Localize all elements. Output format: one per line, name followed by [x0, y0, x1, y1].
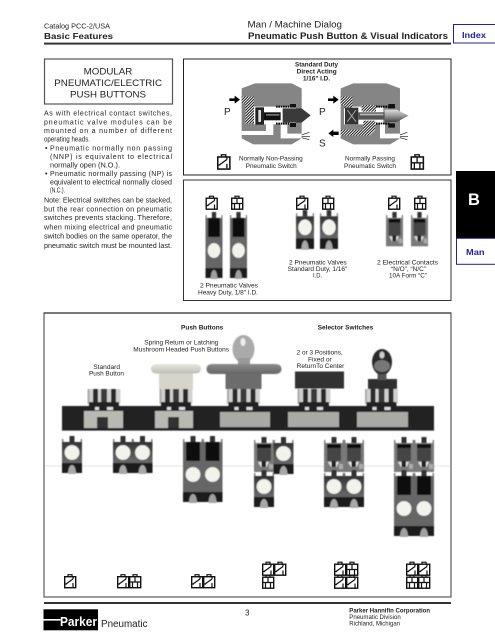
port labels: P — [224, 107, 231, 118]
index tab: Index — [462, 30, 486, 40]
text block: introduction: normally open (N.O.). — [50, 162, 120, 169]
header right: title: Man / Machine Dialog — [248, 20, 342, 30]
label: heavy duty: Heavy Duty, 1/8" I.D. — [198, 290, 258, 297]
panel: standard duty valve schematics — [184, 59, 451, 175]
text block: introduction: operating heads. — [44, 136, 90, 144]
photo: standard duty valves — [296, 210, 338, 250]
symbols: quad heavy — [407, 562, 430, 588]
text block: introduction: Pneumatic normally passing (NP) is — [50, 171, 172, 178]
schematic heading: Standard Duty — [295, 62, 338, 69]
port labels — [224, 107, 326, 150]
text block: introduction: (N.C.). — [50, 188, 65, 195]
label: normally non-passing: Pneumatic Switch — [246, 163, 297, 170]
text block: note: when mixing electrical and pneumatic — [43, 224, 172, 231]
heading box: modular push buttons — [44, 59, 172, 104]
page number: 3 — [245, 609, 250, 618]
symbols: quad electrical — [335, 562, 358, 588]
port labels: S — [319, 139, 326, 150]
header left: catalog and section: Catalog PCC-2/USA — [44, 22, 110, 30]
label: electrical contacts: 2 Electrical Contacts — [377, 259, 438, 266]
label: electrical contacts — [377, 259, 438, 280]
label: normally passing: Pneumatic Switch — [344, 163, 396, 170]
symbols: double heavy — [192, 575, 215, 588]
mounting strip — [62, 406, 434, 431]
label: selector positions: ReturnTo Center — [297, 363, 345, 370]
schematic heading: 1/16" I.D. — [303, 76, 330, 82]
diagram: normally non-passing valve — [229, 83, 311, 144]
symbols: standard duty — [297, 196, 334, 209]
label: mushroom heads: Spring Return or Latching — [144, 340, 219, 347]
footer: company address: Richland, Michigan — [349, 621, 400, 628]
diagram: normally passing valve — [328, 83, 409, 144]
port labels: P — [319, 107, 326, 118]
logo: Parker Pneumatic — [44, 609, 148, 630]
text block: introduction: equivalent to electrical normally closed — [50, 179, 172, 186]
text block: note: pneumatic switch must be mounted last. — [44, 243, 172, 250]
label: selector positions — [297, 350, 345, 370]
label: normally non-passing: Normally Non-Passing — [239, 155, 303, 162]
text block: introduction: pneumatic valve modules can be — [44, 120, 172, 126]
heading: selector switches: Selector Switches — [318, 325, 374, 332]
heading box: modular push buttons: PUSH BUTTONS — [70, 90, 146, 100]
text block: introduction: Pneumatic normally non passing — [50, 146, 172, 152]
side tab: Man: Man — [466, 247, 484, 257]
label: heavy duty: 2 Pneumatic Valves — [200, 282, 258, 289]
text block: introduction: (NNP) is equivalent to electrical — [50, 154, 172, 161]
label: selector positions: Fixed or — [308, 356, 333, 363]
panel: valve and contact modules — [184, 180, 451, 300]
standard head — [88, 389, 120, 410]
symbols: mixed triple — [263, 562, 286, 588]
logo: Parker Pneumatic: Pneumatic — [101, 619, 148, 630]
text block: introduction: mounted on a number of different — [44, 128, 172, 135]
heading box: modular push buttons: MODULAR — [84, 66, 133, 76]
label: electrical contacts: “N/O”, “N/C” — [391, 266, 426, 273]
header right: title — [248, 20, 448, 41]
label: mushroom heads: Mushroom Headed Push Buttons — [133, 346, 229, 353]
text block: note: but the rear connection on pneumatic — [44, 206, 172, 213]
side tab: section B: B — [468, 191, 480, 209]
text block: note — [43, 198, 172, 250]
photo: electrical contacts — [386, 212, 428, 246]
logo: Parker Pneumatic: Parker — [60, 614, 97, 629]
label: standard duty — [288, 259, 347, 280]
label: standard duty: 2 Pneumatic Valves — [289, 259, 347, 266]
photo: operator heads and mounting strip — [62, 335, 434, 431]
key for mushroom head — [232, 335, 254, 366]
label: electrical contacts: 10A Form “C” — [389, 273, 427, 280]
side tab: section B — [456, 171, 495, 238]
symbols: electrical — [389, 196, 426, 209]
text block: introduction: • — [45, 171, 48, 178]
schematic heading: Direct Acting — [297, 68, 337, 76]
key selector head — [365, 349, 398, 410]
symbols: single — [65, 575, 76, 588]
heading: push buttons: Push Buttons — [181, 325, 224, 332]
label: standard duty: Standard Duty, 1/16" — [288, 266, 347, 273]
text block: introduction — [44, 111, 172, 195]
label: mushroom heads — [133, 340, 229, 353]
label: normally non-passing — [239, 155, 303, 170]
text block: note: Note: Electrical switches can be stacked, — [44, 198, 172, 205]
schematic heading — [295, 62, 338, 82]
header left: catalog and section: Basic Features — [44, 31, 113, 41]
text block: note: switch bodies on the same operator, the — [44, 233, 172, 240]
footer: company address — [349, 607, 430, 628]
heading box: modular push buttons: PNEUMATIC/ELECTRIC — [54, 78, 162, 88]
header left: catalog and section — [44, 22, 113, 41]
label: standard duty: I.D. — [313, 273, 322, 280]
label: selector positions: 2 or 3 Positions, — [297, 350, 343, 357]
dark mushroom head — [206, 364, 282, 410]
symbols: double standard — [118, 575, 141, 588]
label: normally passing: Normally Passing — [345, 155, 395, 162]
panel: operator configurations — [44, 313, 451, 597]
photo: heavy duty valves — [206, 212, 247, 279]
footer: company address: Parker Hannifin Corporation — [349, 607, 430, 614]
header right: title: Pneumatic Push Button & Visual Indicators — [248, 31, 448, 41]
symbol: normally non-passing — [218, 155, 230, 169]
selector head — [295, 372, 344, 410]
label: standard push button — [89, 364, 124, 378]
side tab: Man — [456, 238, 495, 264]
white mushroom head — [151, 364, 201, 410]
label: normally passing — [344, 155, 396, 170]
symbols: heavy duty — [206, 196, 243, 209]
text block: introduction: • — [45, 146, 48, 152]
text block: note: switches prevents stacking. Therefore, — [44, 215, 172, 222]
footer: company address: Pneumatic Division — [349, 614, 401, 621]
strip inserts — [84, 411, 408, 428]
label: standard push button: Standard — [93, 364, 120, 371]
photo: stacked modules — [62, 436, 434, 537]
symbol: normally passing — [411, 155, 423, 169]
text block: introduction: As with electrical contact switches, — [44, 111, 172, 118]
label: standard push button: Push Button — [89, 371, 124, 378]
label: heavy duty — [198, 282, 258, 297]
index tab — [454, 24, 495, 43]
